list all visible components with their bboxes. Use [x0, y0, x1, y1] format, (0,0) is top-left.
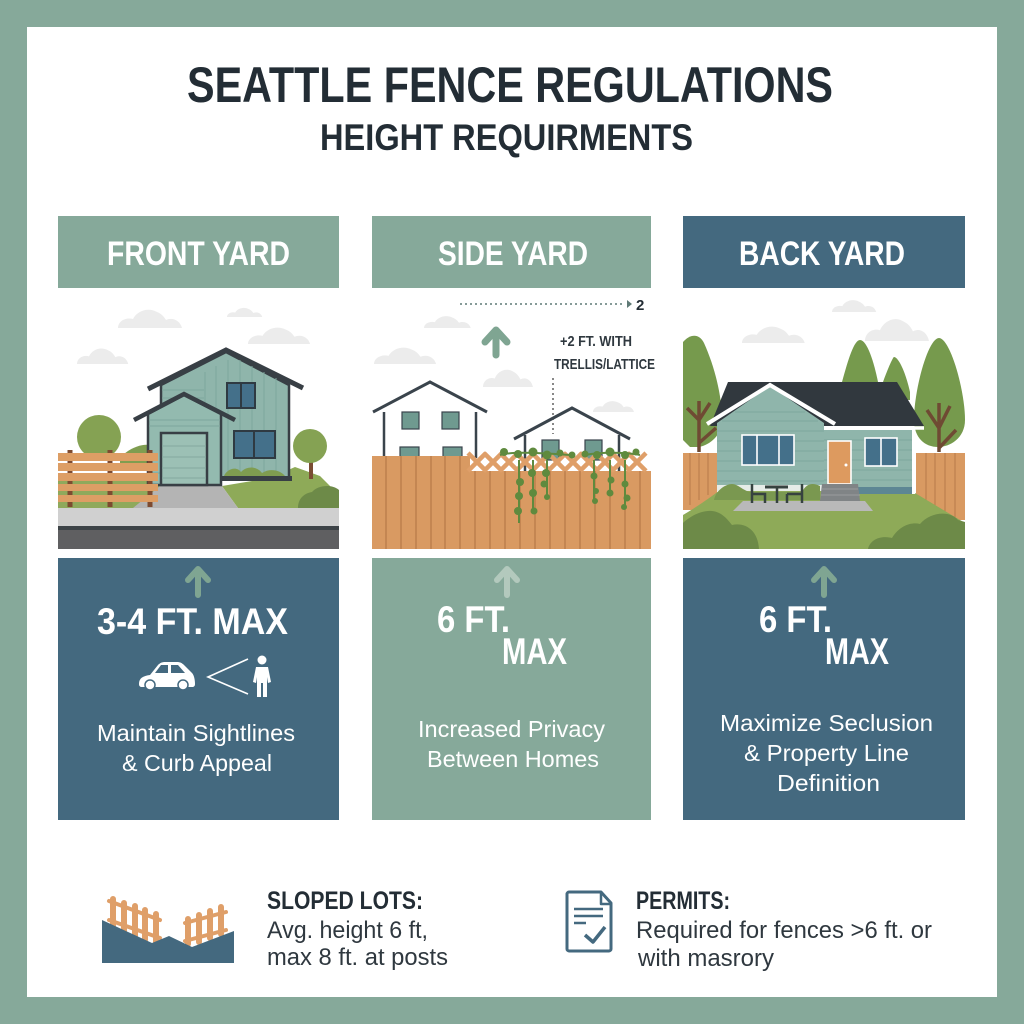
- icon: fence on sloped ground: [102, 899, 234, 963]
- limit value: 6 FT.: [437, 599, 510, 640]
- description: & Property Line: [744, 740, 909, 766]
- back yard limit box: [683, 558, 965, 820]
- icon: car and sightline to person: [139, 656, 271, 697]
- panel: front yard: [58, 216, 339, 820]
- sloped lots text: SLOPED LOTS:: [267, 887, 423, 915]
- permits text: PERMITS:: [636, 887, 730, 915]
- note: permits: [567, 887, 932, 972]
- description: Increased Privacy: [418, 716, 605, 742]
- limit value: [437, 599, 567, 672]
- side yard illustration: [372, 297, 655, 549]
- description: [418, 716, 605, 772]
- back yard illustration: [683, 300, 965, 549]
- sloped lots text: [267, 887, 448, 971]
- limit value: MAX: [825, 631, 889, 672]
- front yard heading: [58, 216, 339, 288]
- side yard limit box: [372, 558, 651, 820]
- description: & Curb Appeal: [122, 750, 272, 776]
- description: [97, 720, 295, 776]
- permits text: [636, 887, 932, 972]
- up arrow: [497, 569, 517, 595]
- side yard heading: SIDE YARD: [438, 235, 588, 273]
- title: SEATTLE FENCE REGULATIONS: [187, 57, 833, 113]
- up arrow: [188, 569, 208, 595]
- limit value: 3-4 FT. MAX: [97, 601, 288, 642]
- back yard heading: BACK YARD: [739, 235, 905, 273]
- limit value: 6 FT.: [759, 599, 832, 640]
- permits text: Required for fences >6 ft. or: [636, 917, 932, 944]
- sloped lots text: Avg. height 6 ft,: [267, 917, 428, 944]
- limit value: [759, 599, 889, 672]
- subtitle: HEIGHT REQUIRMENTS: [320, 117, 693, 158]
- front yard limit box: [58, 558, 339, 820]
- note: sloped lots: [102, 887, 448, 971]
- panel: back yard: [683, 216, 965, 820]
- side yard heading: [372, 216, 651, 288]
- icon: permit document: [567, 892, 611, 951]
- up arrow: [814, 569, 834, 595]
- back yard heading: [683, 216, 965, 288]
- description: Maximize Seclusion: [720, 710, 933, 736]
- permits text: with masrory: [637, 945, 774, 972]
- panel: side yard: [372, 216, 655, 820]
- front yard illustration: [58, 308, 339, 549]
- sloped lots text: max 8 ft. at posts: [267, 944, 448, 971]
- description: Definition: [777, 770, 880, 796]
- side yard illustration: +2 FT. WITH: [560, 333, 632, 350]
- side yard illustration: TRELLIS/LATTICE: [554, 356, 655, 373]
- limit value: MAX: [502, 631, 567, 672]
- side yard illustration: 2: [636, 297, 644, 314]
- front yard heading: FRONT YARD: [107, 235, 290, 273]
- description: Between Homes: [427, 746, 599, 772]
- description: Maintain Sightlines: [97, 720, 295, 746]
- description: [720, 710, 933, 796]
